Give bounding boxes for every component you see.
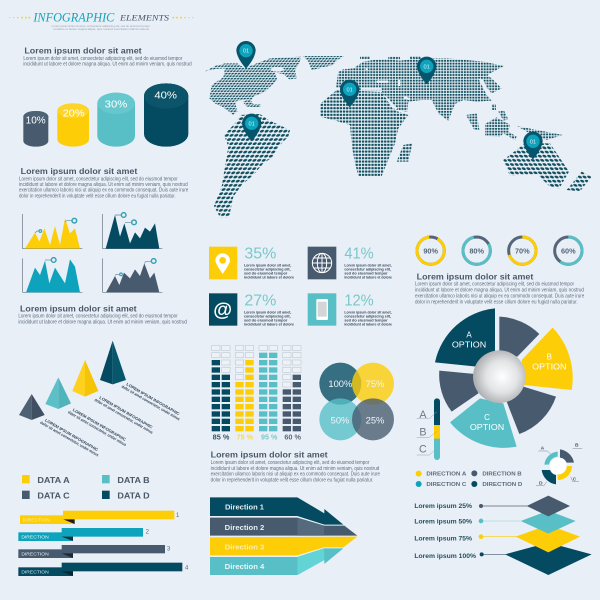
pyramid label navy: dolor sit amet consectetur, under minus: [121, 384, 182, 422]
cylinder 10%: [23, 111, 48, 147]
yellow column: [235, 360, 254, 431]
text block: arrows: Lorem ipsum dolor sit amet, consectetur adipiscing elit, sed do eiusmod tempor: [211, 460, 370, 466]
heading: cylinders: Lorem ipsum dolor sit amet: [24, 47, 142, 56]
venn diagram: 50%: [331, 415, 349, 425]
stat 35%: 35%: [244, 246, 277, 263]
label B: OPTION: [532, 362, 567, 371]
text block: rings: [415, 282, 584, 305]
direction legend: DIRECTION D: [482, 482, 522, 488]
title main word: INFOGRAPHIC: [32, 11, 115, 25]
stat 12%: incididunt ut labore et dolore: [344, 321, 393, 326]
label A: OPTION: [452, 340, 486, 349]
text block: pyramids: incididunt ut labore et dolore magna aliqua. Ut enim ad minim veniam, quis nostrud: [18, 320, 187, 326]
direction bar 3: [18, 545, 171, 558]
grid percent labels: 85 %: [213, 434, 230, 441]
data legend: DATA C: [37, 490, 70, 500]
stat 12%: 12%: [344, 293, 374, 310]
map: hudson bay gap: [271, 67, 284, 72]
empty cells: [212, 345, 301, 387]
segment C: [450, 398, 517, 448]
pyramid label slate: LOREM IPSUM INFOGRAPHIC: [44, 418, 99, 452]
map: africa: [320, 90, 408, 176]
pyramid label slate: dolor sit amet consectetur, under minus: [39, 420, 100, 458]
segment B: [522, 328, 573, 390]
layer 100%: Lorem ipsum 100%: [414, 553, 476, 560]
stat 27%: sed do eiusmod tempor: [244, 317, 288, 322]
arrow direction 1: Direction 1: [225, 505, 264, 512]
map: australia: [503, 143, 569, 188]
stat 35%: [209, 246, 295, 279]
ring 60%: 60%: [561, 246, 576, 255]
label A: [452, 330, 486, 349]
arrow direction 2: [210, 518, 357, 536]
text block: rings: incididunt ut labore et dolore magna aliqua. Ut enim ad minim veniam, quis nostrud: [415, 288, 584, 294]
block bar grid: [212, 345, 302, 441]
abc legend: B: [419, 426, 426, 438]
stat 27%: @: [213, 300, 232, 321]
text block: arrows: [211, 460, 380, 483]
stat 41%: Lorem ipsum dolor sit amet,: [344, 262, 392, 267]
venn diagram: 75%: [366, 379, 384, 389]
map: northern islands: [360, 56, 421, 60]
map pin 1: [236, 41, 256, 69]
text block: pyramids: Lorem ipsum dolor sit amet, consectetur adipiscing elit, sed do eiusmod tempor: [18, 314, 178, 320]
direction legend: DIRECTION A: [426, 472, 466, 478]
navy column: [212, 360, 230, 431]
arrow direction 4: [210, 548, 343, 575]
layer 25%: Lorem ipsum 25%: [414, 503, 472, 510]
map pin 5: 01: [530, 139, 536, 145]
direction bar 4: [18, 563, 189, 576]
venn diagram: [319, 363, 394, 440]
central sphere: [473, 350, 526, 403]
map: new zealand: [567, 172, 592, 191]
map: madagascar: [397, 143, 412, 162]
cylinder 30%: [97, 93, 135, 147]
mini donut chart: D: [539, 480, 543, 486]
layer 25%: [414, 496, 570, 516]
layer 50%: [414, 511, 576, 534]
map pin 1: 01: [243, 49, 249, 55]
map: indonesia: [485, 117, 517, 140]
text block: charts: Lorem ipsum dolor sit amet, consectetur adipiscing elit, sed do eiusmod tempor: [19, 176, 178, 182]
data legend: DATA A: [37, 475, 70, 485]
arrow direction 2: Direction 2: [225, 525, 264, 532]
cylinder 20%: 20%: [63, 108, 85, 119]
data legend: DATA D: [117, 490, 150, 500]
heading: rings: Lorem ipsum dolor sit amet: [417, 273, 534, 282]
pyramid yellow: [72, 360, 98, 397]
stat 12%: [308, 293, 393, 326]
area chart yellow: [23, 214, 82, 249]
layer 75%: Lorem ipsum 75%: [414, 535, 472, 542]
direction bar 3: DIRECTION: [21, 552, 49, 557]
layer 100%: [414, 543, 592, 575]
text block: cylinders: Lorem ipsum dolor sit amet, consectetur adipiscing elit, sed do eiusmod tempor: [23, 56, 183, 62]
map: japan and philippines: [492, 104, 508, 121]
arrow direction 4: Direction 4: [225, 564, 264, 571]
area chart navy: [103, 213, 162, 249]
cylinder 20%: [57, 103, 89, 147]
segment slate right: [507, 387, 556, 434]
stat 12%: Lorem ipsum dolor sit amet,: [344, 309, 392, 314]
stat 12%: sed do eiusmod tempor: [344, 317, 388, 322]
direction bar 4: DIRECTION: [21, 570, 49, 575]
ring 90%: [412, 232, 449, 269]
subtitle: ut labore et dolore magna aliqua, quis nostrud exercitation ullamco laboris: [53, 27, 150, 31]
text block: charts: dolor in reprehenderit in voluptate velit esse cillum dolore eu fugiat nulla pariatur.: [19, 194, 176, 200]
cylinder 10%: 10%: [26, 116, 46, 127]
direction bar 2: [18, 528, 150, 541]
title decorative dots left: [9, 17, 30, 19]
mini donut chart: A: [541, 446, 545, 452]
direction legend: DIRECTION B: [482, 472, 522, 478]
map: new guinea: [517, 126, 563, 140]
subtitle: Lorem ipsum dolor sit amet, consectetur adipiscing elit, sed do eiusmod tempor: [52, 24, 150, 28]
data legend: [22, 475, 150, 500]
right column: rings and pie: [412, 232, 584, 460]
stat 27%: consectetur adipiscing elit,: [244, 313, 291, 318]
map: greenland: [303, 56, 344, 70]
ring 70%: [509, 237, 536, 264]
area charts and pyramids: [18, 213, 187, 458]
direction bar 1: [20, 511, 180, 524]
area chart teal: [23, 258, 82, 292]
grid percent labels: 95 %: [261, 434, 278, 441]
ring 80%: [458, 232, 495, 269]
map pin 4: 01: [424, 64, 430, 70]
stat 41%: 41%: [344, 246, 374, 263]
direction bar 1: 1: [176, 513, 180, 519]
stat 27%: 27%: [244, 293, 277, 310]
text block: cylinders: incididunt ut labore et dolore magna aliqua. Ut enim ad minim veniam, quis nostrud: [23, 62, 192, 68]
subtitle: [52, 24, 150, 31]
abc legend: A: [419, 409, 427, 421]
stat 35%: incididunt ut labore et dolore: [244, 274, 295, 279]
map: north america: [205, 57, 301, 115]
bottom middle: arrows: [210, 451, 380, 575]
stat 27%: incididunt ut labore et dolore: [244, 321, 295, 326]
label C: OPTION: [470, 423, 504, 432]
text block: charts: exercitation ullamco laboris nisi ut aliquip ex ea commodo consequat. Duis aute irure: [19, 188, 188, 194]
direction bar 2: DIRECTION: [21, 535, 49, 540]
heading: arrows: Lorem ipsum dolor sit amet: [211, 451, 328, 460]
title second word: ELEMENTS: [119, 13, 170, 23]
map: south america: [214, 114, 290, 217]
title: [9, 11, 194, 200]
data legend: DATA B: [117, 475, 150, 485]
label C: C: [484, 413, 490, 422]
map pin 3: 01: [347, 87, 353, 93]
pie chart: [435, 308, 573, 448]
pyramid slate: [19, 394, 45, 420]
map pin 2: 01: [249, 121, 255, 127]
arrow direction 3: Direction 3: [225, 544, 264, 551]
map: inland seas gaps: [361, 68, 409, 109]
bottom left: data legend and direction bars: [18, 475, 189, 576]
stat 41%: sed do eiusmod tempor: [344, 270, 388, 275]
map pin 2: [242, 114, 261, 141]
pyramid label teal: LOREM IPSUM INFOGRAPHIC: [72, 407, 127, 442]
stat 35%: consectetur adipiscing elit,: [244, 266, 291, 271]
slate column: [283, 375, 301, 431]
segment slate top: [499, 317, 539, 357]
stat 12%: consectetur adipiscing elit,: [344, 313, 391, 318]
map: eurasia: [336, 58, 504, 121]
pyramid teal: [45, 377, 71, 409]
layer 50%: Lorem ipsum 50%: [414, 518, 472, 525]
text block: arrows: incididunt ut labore et dolore magna aliqua. Ut enim ad minim veniam, quis nostrud: [211, 466, 379, 472]
ring 90%: 90%: [423, 246, 438, 255]
text block: charts: [19, 176, 188, 200]
cylinder 40%: 40%: [154, 91, 177, 102]
pyramid label yellow: dolor sit amet consectetur, under minus: [94, 397, 155, 435]
abc legend: C: [419, 443, 427, 455]
pyramid label navy: LOREM IPSUM INFOGRAPHIC: [125, 382, 181, 416]
venn diagram: 25%: [366, 415, 384, 425]
map: caribbean islands: [243, 99, 261, 107]
pyramid label yellow: LOREM IPSUM INFOGRAPHIC: [98, 395, 154, 430]
map pin 4: [417, 57, 436, 84]
abc legend: [417, 398, 440, 460]
direction legend: [416, 470, 522, 488]
stat 41%: consectetur adipiscing elit,: [344, 266, 391, 271]
grid percent labels: 75 %: [237, 434, 254, 441]
heading: charts: Lorem ipsum dolor sit amet: [21, 167, 138, 176]
stat 27%: Lorem ipsum dolor sit amet,: [244, 309, 291, 314]
map pin 5: [523, 132, 543, 159]
pyramid navy: [100, 341, 126, 384]
grid percent labels: 60 %: [284, 434, 302, 441]
layer 75%: [414, 525, 580, 552]
text block: rings: dolor in reprehenderit in voluptate velit esse cillum dolore eu fugiat nulla pariatur.: [415, 299, 578, 305]
direction bar 1: DIRECTION: [23, 518, 50, 523]
segment A: [435, 308, 495, 367]
stat 27%: [209, 293, 295, 326]
segment slate left: [439, 371, 478, 412]
stat 35%: sed do eiusmod tempor: [244, 270, 288, 275]
ring 60%: [555, 237, 582, 264]
arrow direction 1: [210, 497, 343, 525]
heading: pyramids: Lorem ipsum dolor sit amet: [20, 304, 137, 313]
text block: rings: Lorem ipsum dolor sit amet, consectetur adipiscing elit, sed do eiusmod tempor: [415, 282, 574, 288]
text block: arrows: exercitation ullamco laboris nisi ut aliquip ex ea commodo consequat. Duis aute irure: [211, 472, 380, 478]
icon stats, bar grid and venn: [209, 246, 394, 441]
title decorative dots right: [172, 17, 194, 19]
label C: [470, 413, 504, 432]
direction bar 2: 2: [146, 530, 150, 536]
label B: [532, 352, 567, 371]
stat 41%: [308, 246, 393, 279]
mini donut chart: [536, 443, 582, 486]
cylinder chart: [23, 83, 188, 147]
world map: [205, 41, 592, 217]
label A: A: [466, 330, 472, 339]
pyramid label teal: dolor sit amet consectetur, under minus: [67, 409, 128, 447]
ring 80%: 80%: [469, 246, 484, 255]
text block: cylinders: [23, 56, 192, 68]
map pin 3: [340, 80, 359, 107]
label B: B: [547, 352, 552, 361]
mini donut chart: C: [573, 477, 577, 483]
text block: charts: incididunt ut labore et dolore magna aliqua. Ut enim ad minim veniam, quis nostrud: [19, 182, 188, 188]
area chart slate: [103, 258, 162, 292]
direction legend: DIRECTION C: [426, 482, 466, 488]
cylinder 30%: 30%: [105, 100, 128, 111]
bottom right: direction legend and layers: [414, 443, 592, 575]
teal column: [259, 353, 277, 431]
map: indochina: [466, 113, 479, 130]
arrow direction 3: [210, 537, 357, 555]
direction bar 4: 4: [185, 565, 189, 571]
stat 41%: incididunt ut labore et dolore: [344, 274, 393, 279]
mini donut chart: B: [575, 443, 579, 449]
grid percent labels: [213, 434, 302, 441]
text block: arrows: dolor in reprehenderit in voluptate velit esse cillum dolore eu fugiat nulla pariatur.: [211, 477, 373, 483]
text block: pyramids: [18, 314, 187, 326]
stat 35%: Lorem ipsum dolor sit amet,: [244, 262, 291, 267]
cylinder 40%: [144, 83, 188, 147]
venn diagram: 100%: [328, 379, 352, 389]
direction bar 3: 3: [167, 547, 171, 553]
ring 70%: 70%: [515, 246, 530, 255]
